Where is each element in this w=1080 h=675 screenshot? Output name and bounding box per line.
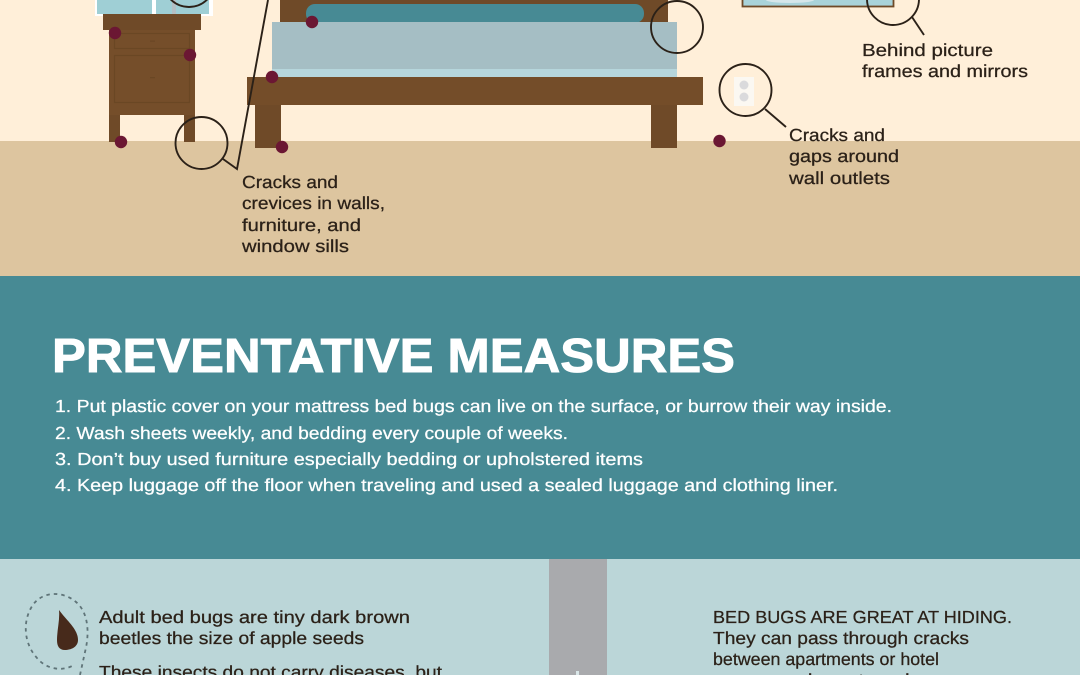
magnifier: headboard <box>651 1 703 53</box>
label: behind picture frames <box>862 40 1028 81</box>
text: adult bed bugs <box>99 607 442 675</box>
wall outlet <box>734 77 754 106</box>
magnifier: walls and furniture <box>176 0 268 169</box>
heading: PREVENTATIVE MEASURES <box>52 330 735 383</box>
panel: bed bug facts <box>0 559 1080 675</box>
window <box>95 0 213 16</box>
bedroom floor <box>0 141 1080 276</box>
label: wall outlets <box>788 125 899 188</box>
grey column <box>549 559 607 675</box>
panel: preventative measures <box>0 276 1080 559</box>
text: great at hiding: between apartments or hotel <box>713 649 939 669</box>
icon: apple seed in dashed bubble <box>26 594 88 675</box>
magnifier: picture frame <box>867 0 924 35</box>
label: behind picture frames: frames and mirrors <box>862 61 1028 81</box>
label: cracks and crevices <box>241 172 385 256</box>
text: great at hiding: BED BUGS ARE GREAT AT HIDING. <box>713 607 1012 627</box>
label: wall outlets: gaps around <box>789 146 899 166</box>
text: great at hiding <box>713 607 1012 675</box>
measures list: 4. Keep luggage off the floor when traveling and used a sealed luggage and clothing liner. <box>55 475 838 495</box>
label: cracks and crevices: Cracks and <box>242 172 338 192</box>
nightstand <box>103 14 201 142</box>
measures list <box>55 396 892 495</box>
text: adult bed bugs: beetles the size of apple seeds <box>99 628 364 648</box>
bed <box>247 0 703 148</box>
bedroom wall <box>0 0 1080 142</box>
text: great at hiding: They can pass through cracks <box>713 628 969 648</box>
measures list: 2. Wash sheets weekly, and bedding every couple of weeks. <box>55 423 568 443</box>
label: cracks and crevices: window sills <box>241 236 349 256</box>
label: behind picture frames: Behind picture <box>862 40 993 60</box>
magnifier: wall outlet <box>720 64 786 127</box>
label: cracks and crevices: crevices in walls, <box>242 193 385 213</box>
text: adult bed bugs: Adult bed bugs are tiny dark brown <box>99 607 410 627</box>
measures list: 3. Don’t buy used furniture especially bedding or upholstered items <box>55 449 643 469</box>
bed bug markers <box>109 16 726 153</box>
label: wall outlets: Cracks and <box>789 125 885 145</box>
measures list: 1. Put plastic cover on your mattress bed bugs can live on the surface, or burrow their way inside. <box>55 396 892 416</box>
label: wall outlets: wall outlets <box>788 168 890 188</box>
picture frame <box>742 0 894 6</box>
magnifier: window sill <box>163 0 215 7</box>
label: cracks and crevices: furniture, and <box>242 215 361 235</box>
